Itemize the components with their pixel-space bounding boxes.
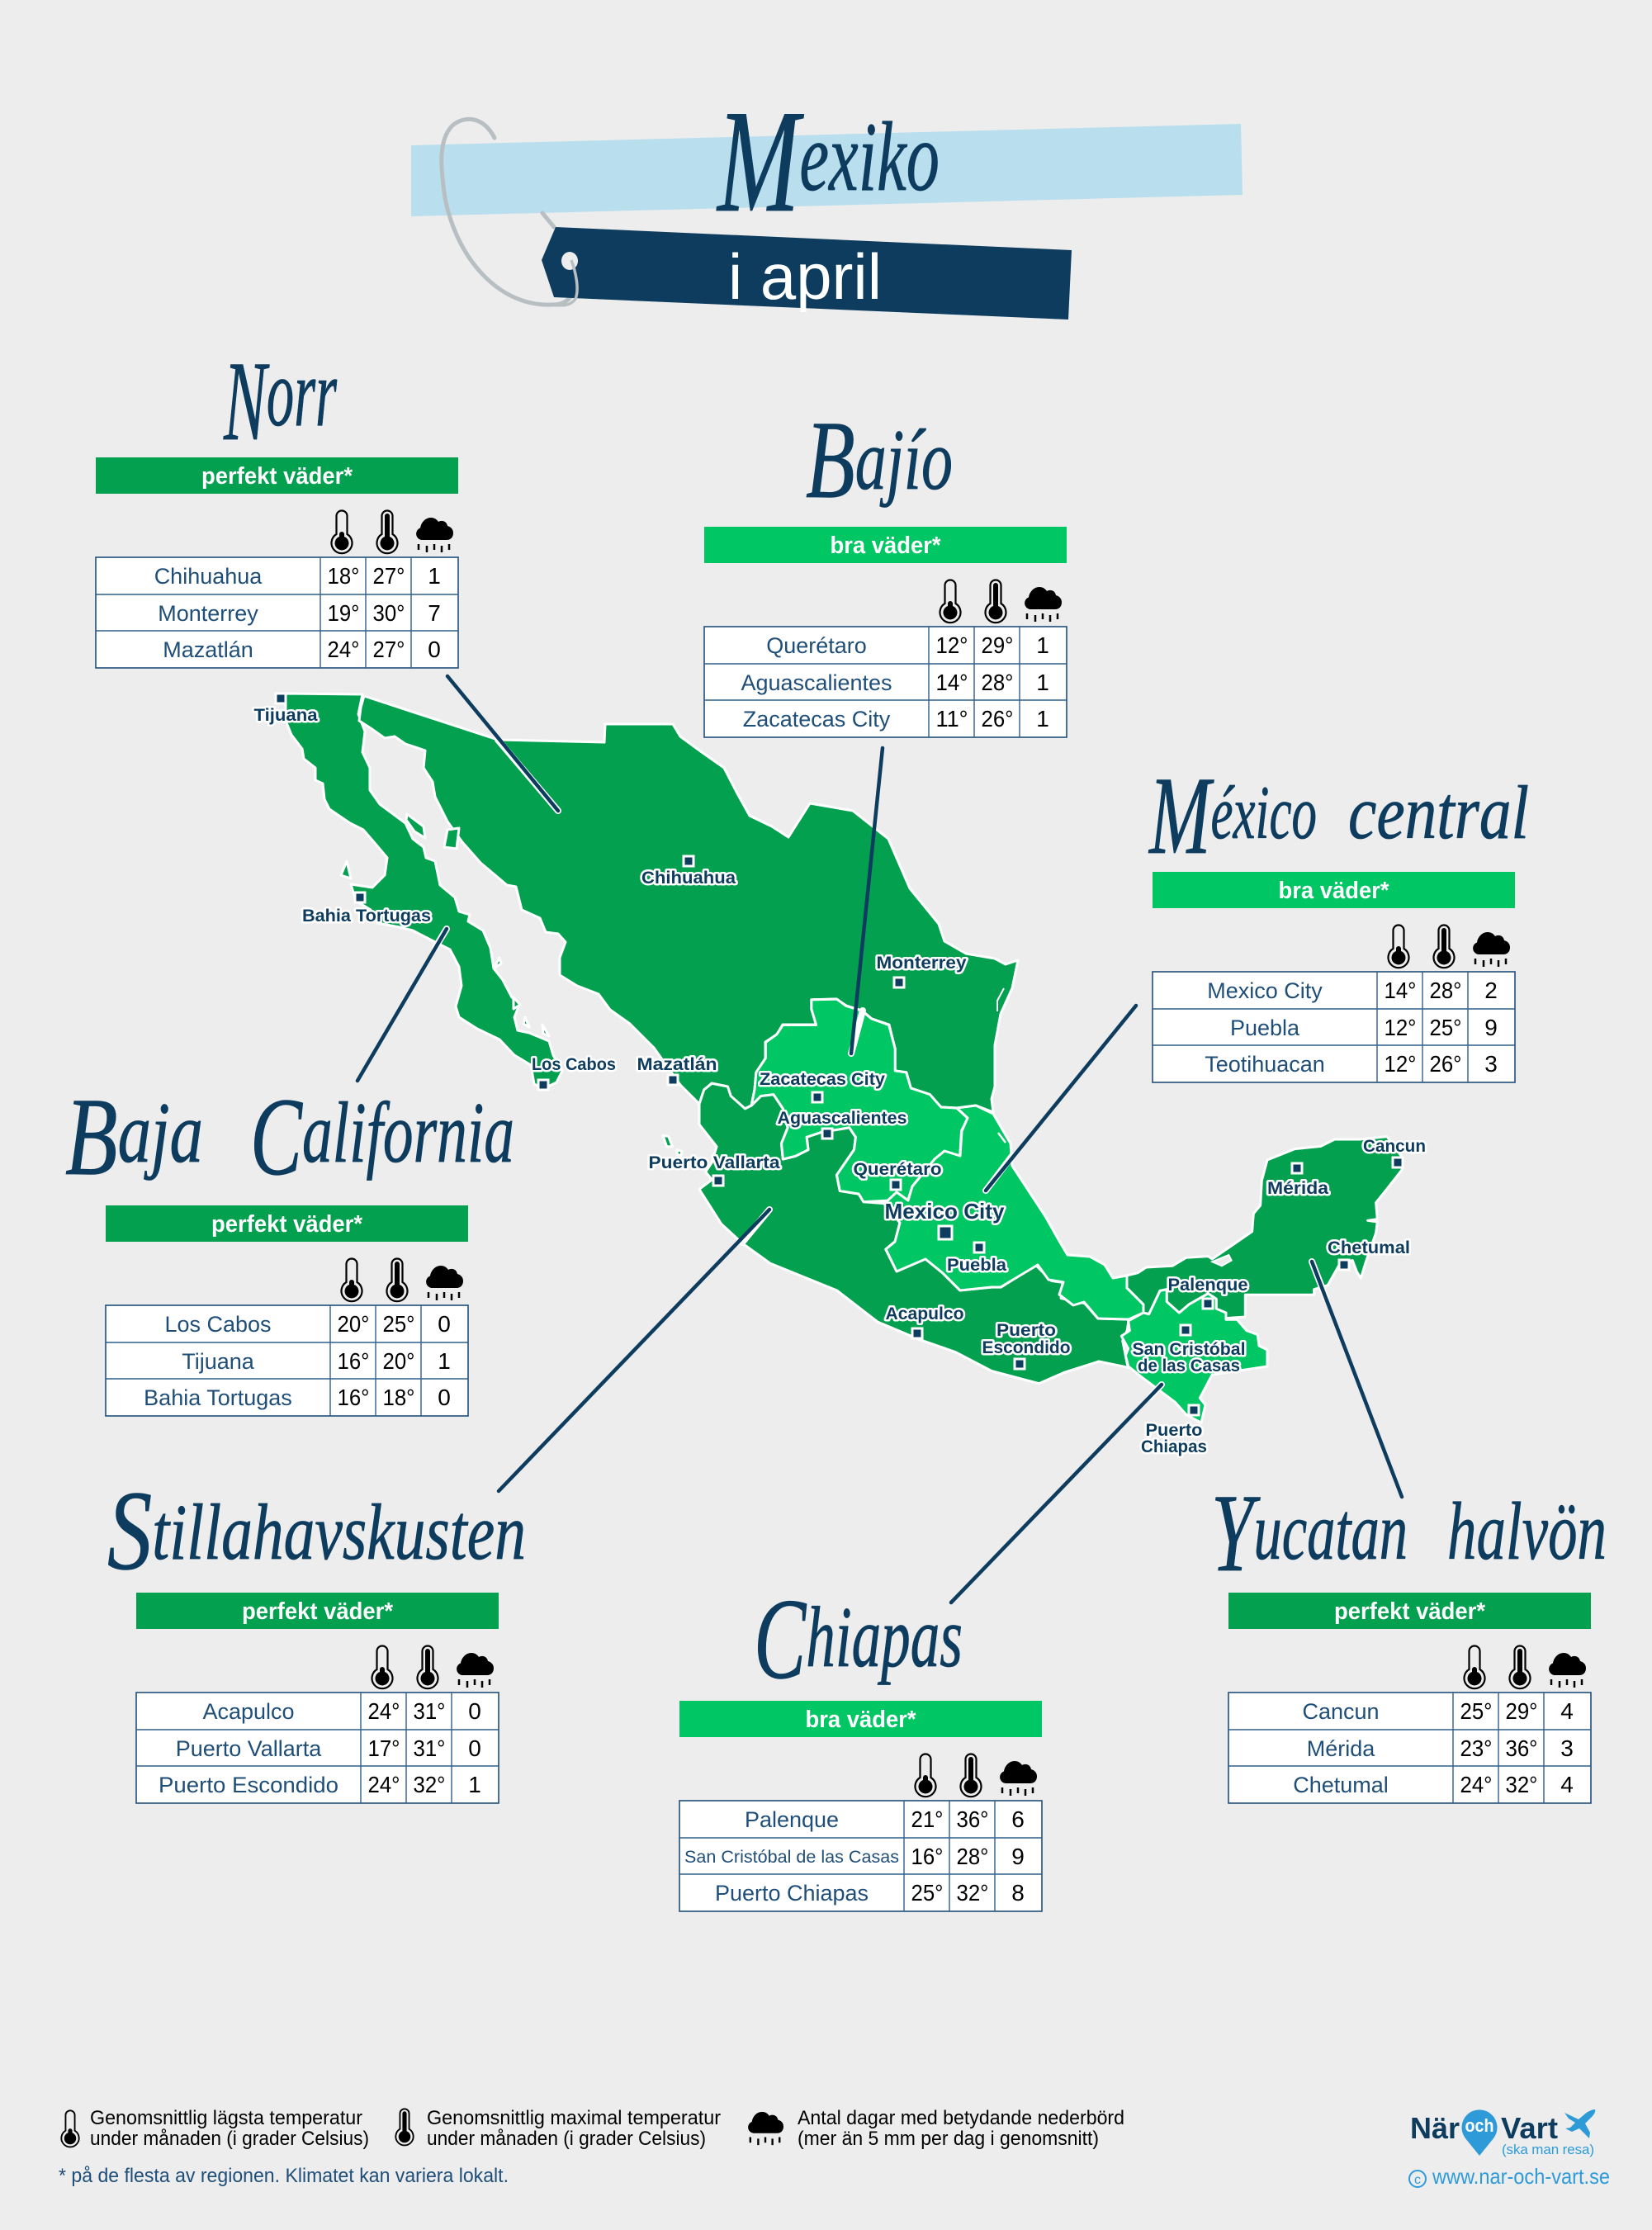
weather table: Mazatlán bbox=[163, 637, 253, 662]
heading: Yucatan halvön bbox=[1211, 1472, 1607, 1595]
badge: perfekt väder bbox=[1228, 1593, 1591, 1629]
weather table: Zacatecas City bbox=[743, 707, 891, 731]
badge: bra väder: bra väder* bbox=[1278, 878, 1389, 904]
weather table: 0 bbox=[468, 1735, 481, 1761]
weather table: 27° bbox=[373, 563, 405, 589]
icon: map pin bbox=[1461, 2109, 1498, 2156]
tagline: (ska man resa) bbox=[1502, 2142, 1594, 2157]
weather table: Teotihuacan bbox=[1205, 1052, 1325, 1077]
region: Yucatan halvön bbox=[1127, 1137, 1402, 1319]
weather table: 2 bbox=[1484, 978, 1498, 1003]
weather table: 1 bbox=[428, 563, 441, 589]
weather table: 36° bbox=[1506, 1735, 1537, 1761]
weather table: 23° bbox=[1460, 1735, 1493, 1761]
weather table: 28° bbox=[981, 670, 1014, 695]
copyright and website: c bbox=[1414, 2173, 1421, 2187]
city labels: Mexico City bbox=[885, 1199, 1005, 1224]
city labels: Chiapas bbox=[1141, 1437, 1207, 1456]
heading: Chiapas: C bbox=[754, 1575, 807, 1703]
weather table: 0 bbox=[438, 1385, 451, 1410]
badge: bra väder bbox=[1153, 872, 1515, 908]
weather table: 26° bbox=[981, 706, 1014, 731]
city labels: Mérida bbox=[1267, 1179, 1328, 1198]
city labels: Acapulco bbox=[885, 1304, 964, 1323]
weather table: 1 bbox=[1036, 706, 1049, 731]
title block: Mexiko i april bbox=[411, 79, 1243, 320]
legend bbox=[59, 2107, 1124, 2187]
heading: México central: éxico bbox=[1210, 770, 1317, 855]
weather table: 18° bbox=[327, 563, 360, 589]
weather table: Los Cabos bbox=[164, 1312, 272, 1337]
weather table: 6 bbox=[1011, 1806, 1025, 1832]
weather table: 31° bbox=[413, 1698, 446, 1724]
leader: Bajío bbox=[851, 748, 883, 1053]
weather table bbox=[96, 557, 458, 668]
weather table: 0 bbox=[468, 1698, 481, 1724]
legend item: minimum temperature bbox=[61, 2107, 369, 2150]
weather table: 25° bbox=[1430, 1015, 1461, 1040]
weather table: Acapulco bbox=[202, 1699, 295, 1724]
weather table: Puerto Vallarta bbox=[176, 1736, 322, 1761]
weather table: 4 bbox=[1560, 1698, 1574, 1724]
weather table: 14° bbox=[936, 670, 968, 695]
weather table: 32° bbox=[1506, 1772, 1537, 1797]
weather table bbox=[136, 1693, 499, 1803]
badge: perfekt väder: perfekt väder* bbox=[211, 1211, 363, 1238]
city labels: Los Cabos bbox=[532, 1055, 616, 1074]
panel: Yucatan halvön bbox=[1211, 1472, 1607, 1803]
city labels: Palenque bbox=[1167, 1276, 1248, 1295]
leader: Yucatan halvön bbox=[1312, 1262, 1402, 1497]
weather table: 32° bbox=[413, 1772, 446, 1797]
weather table bbox=[106, 1305, 468, 1416]
icons: columns bbox=[940, 580, 1062, 623]
city labels: Puerto bbox=[1146, 1421, 1202, 1440]
heading: Baja California: alifornia bbox=[302, 1084, 514, 1181]
weather table: 29° bbox=[981, 632, 1014, 658]
weather table: San Cristóbal de las Casas bbox=[684, 1848, 899, 1867]
heading: Baja California bbox=[65, 1076, 514, 1199]
weather table: 27° bbox=[373, 637, 405, 662]
badge: bra väder: bra väder* bbox=[831, 533, 941, 559]
badge: perfekt väder bbox=[106, 1205, 468, 1242]
weather table: 0 bbox=[428, 637, 441, 662]
weather table: 0 bbox=[438, 1311, 451, 1337]
city markers bbox=[276, 694, 1403, 1415]
subheading: i april: i april bbox=[728, 240, 882, 313]
weather table: 1 bbox=[438, 1348, 451, 1374]
weather table: 29° bbox=[1506, 1698, 1537, 1724]
weather table: Tijuana bbox=[182, 1349, 255, 1374]
weather table: 21° bbox=[911, 1806, 943, 1832]
footnote: * på de flesta av regionen. Klimatet kan variera lokalt. bbox=[59, 2165, 509, 2187]
heading: México central: M bbox=[1148, 755, 1214, 878]
region: Chiapas bbox=[1121, 1290, 1267, 1423]
region: Norr bbox=[359, 696, 1018, 1112]
leader: Baja California bbox=[357, 929, 447, 1081]
weather table: 26° bbox=[1430, 1051, 1461, 1077]
weather table: 4 bbox=[1560, 1772, 1574, 1797]
weather table: Monterrey bbox=[158, 601, 258, 626]
weather table: 9 bbox=[1011, 1844, 1025, 1869]
city labels: Chihuahua bbox=[641, 869, 736, 888]
weather table: 28° bbox=[956, 1844, 989, 1869]
light blue title ribbon bbox=[411, 124, 1243, 216]
heading: México central bbox=[1148, 755, 1529, 878]
heading: Norr: orr bbox=[267, 339, 338, 447]
weather table bbox=[1153, 972, 1515, 1082]
leader lines bbox=[357, 676, 1402, 1603]
string through the hole bbox=[551, 260, 577, 305]
city labels bbox=[254, 706, 1426, 1456]
weather table: 24° bbox=[1460, 1772, 1493, 1797]
leader: México central bbox=[986, 1006, 1136, 1191]
legend item: maximum temperature: Genomsnittlig maximal temperatur bbox=[427, 2107, 721, 2129]
city labels: Querétaro bbox=[854, 1160, 941, 1179]
weather table: 1 bbox=[1036, 632, 1049, 658]
city labels: Zacatecas City bbox=[760, 1070, 885, 1089]
city labels: San Cristóbal bbox=[1133, 1340, 1245, 1359]
heading: Chiapas: hiapas bbox=[806, 1588, 963, 1685]
wordmark: Vart: Vart bbox=[1501, 2111, 1558, 2145]
weather table: 30° bbox=[373, 600, 405, 626]
panel: Norr bbox=[96, 338, 458, 668]
weather table bbox=[1228, 1693, 1591, 1803]
heading: Stillahavskusten: tillahavskusten bbox=[152, 1488, 526, 1576]
weather table: 24° bbox=[327, 637, 360, 662]
weather table: 8 bbox=[1011, 1880, 1025, 1906]
weather table: 32° bbox=[956, 1880, 989, 1906]
map of Mexico bbox=[286, 694, 1402, 1423]
weather table: 19° bbox=[327, 600, 360, 626]
weather table: 25° bbox=[911, 1880, 943, 1906]
heading: Yucatan halvön: Y bbox=[1211, 1472, 1261, 1595]
city labels: Escondido bbox=[982, 1338, 1070, 1357]
weather table: 24° bbox=[368, 1698, 400, 1724]
weather table: 16° bbox=[911, 1844, 943, 1869]
weather table: Chihuahua bbox=[154, 564, 263, 589]
city labels: Mazatlán bbox=[637, 1055, 717, 1074]
heading: Bajío: ajío bbox=[855, 411, 953, 508]
region: Bajío bbox=[751, 999, 968, 1202]
badge: perfekt väder bbox=[136, 1593, 499, 1629]
copyright and website: www.nar-och-vart.se bbox=[1432, 2164, 1610, 2189]
weather table: 17° bbox=[368, 1735, 400, 1761]
icons: columns bbox=[1389, 925, 1510, 968]
panel: México central bbox=[1148, 755, 1529, 1082]
weather table: 18° bbox=[383, 1385, 414, 1410]
heading: Norr: N bbox=[223, 338, 270, 464]
legend item: precipitation days: (mer än 5 mm per dag i genomsnitt) bbox=[798, 2128, 1099, 2150]
heading: Baja California: aja bbox=[118, 1084, 203, 1181]
weather table: Puebla bbox=[1230, 1016, 1300, 1040]
wordmark: och: och bbox=[1465, 2115, 1494, 2136]
weather table: 3 bbox=[1484, 1051, 1498, 1077]
badge: perfekt väder: perfekt väder* bbox=[1334, 1598, 1486, 1625]
panel: Stillahavskusten bbox=[107, 1467, 526, 1803]
badge: perfekt väder: perfekt väder* bbox=[242, 1598, 394, 1625]
weather table: Palenque bbox=[745, 1807, 839, 1832]
legend item: minimum temperature: under månaden (i grader Celsius) bbox=[90, 2128, 369, 2150]
heading: Yucatan halvön: ucatan bbox=[1253, 1485, 1408, 1577]
weather table: Puerto Chiapas bbox=[715, 1881, 869, 1906]
weather table: 12° bbox=[936, 632, 968, 658]
string loop of the tag bbox=[442, 119, 576, 305]
icons: columns bbox=[342, 1258, 463, 1301]
city labels: Puebla bbox=[947, 1256, 1006, 1275]
heading: Mexiko: exiko bbox=[799, 102, 940, 211]
weather table: Mexico City bbox=[1207, 978, 1323, 1003]
weather table: 12° bbox=[1384, 1015, 1417, 1040]
weather table: Querétaro bbox=[766, 633, 867, 658]
heading: México central: central bbox=[1348, 770, 1529, 855]
weather table: 20° bbox=[337, 1311, 370, 1337]
tag hole bbox=[561, 252, 578, 270]
weather table: 14° bbox=[1384, 978, 1417, 1003]
weather table: Aguascalientes bbox=[741, 670, 892, 695]
weather table: 11° bbox=[936, 706, 968, 731]
weather table bbox=[679, 1801, 1042, 1911]
region: Baja California bbox=[286, 694, 562, 1089]
legend item: precipitation days: Antal dagar med betydande nederbörd bbox=[798, 2107, 1124, 2129]
badge: bra väder: bra väder* bbox=[806, 1707, 916, 1733]
panel: Bajío bbox=[704, 399, 1067, 737]
legend item: maximum temperature: under månaden (i grader Celsius) bbox=[427, 2128, 706, 2150]
weather table: 16° bbox=[337, 1385, 370, 1410]
icons: columns bbox=[1465, 1646, 1586, 1688]
weather table: 31° bbox=[413, 1735, 446, 1761]
weather table: Cancun bbox=[1302, 1699, 1380, 1724]
icons: columns bbox=[915, 1754, 1037, 1797]
leader: Chiapas bbox=[951, 1385, 1162, 1603]
weather table: 25° bbox=[383, 1311, 414, 1337]
weather table: 12° bbox=[1384, 1051, 1417, 1077]
panel: Baja California bbox=[65, 1076, 514, 1416]
badge: perfekt väder: perfekt väder* bbox=[201, 463, 353, 490]
navy tag bbox=[542, 227, 1072, 320]
weather table: 7 bbox=[428, 600, 441, 626]
heading: Mexiko: M bbox=[716, 79, 804, 243]
weather table: 20° bbox=[383, 1348, 414, 1374]
weather table: 9 bbox=[1484, 1015, 1498, 1040]
region: México central bbox=[884, 1106, 1143, 1319]
region: Stillahavskusten bbox=[663, 1083, 1137, 1384]
heading: Bajío: B bbox=[806, 399, 855, 522]
city labels: Puerto bbox=[996, 1321, 1056, 1340]
wordmark: När: När bbox=[1410, 2111, 1460, 2145]
icons: columns bbox=[332, 510, 453, 553]
badge: bra väder bbox=[679, 1701, 1042, 1737]
heading: Stillahavskusten: S bbox=[107, 1467, 152, 1593]
weather table: 28° bbox=[1430, 978, 1461, 1003]
weather table: 3 bbox=[1560, 1735, 1574, 1761]
weather table: Mérida bbox=[1307, 1736, 1375, 1761]
badge: bra väder bbox=[704, 527, 1067, 563]
logo: När och Vart bbox=[1409, 2109, 1610, 2189]
city labels: Puerto Vallarta bbox=[649, 1153, 780, 1172]
weather table: 36° bbox=[956, 1806, 989, 1832]
city labels: Bahia Tortugas bbox=[302, 907, 431, 926]
legend item: precipitation days bbox=[748, 2107, 1124, 2150]
city labels: Monterrey bbox=[877, 954, 967, 973]
weather table: Chetumal bbox=[1293, 1773, 1389, 1797]
weather table: Bahia Tortugas bbox=[144, 1385, 292, 1410]
badge: perfekt väder bbox=[96, 457, 458, 494]
legend item: maximum temperature bbox=[395, 2107, 721, 2150]
weather table: 16° bbox=[337, 1348, 370, 1374]
weather table: 25° bbox=[1460, 1698, 1493, 1724]
weather table: 1 bbox=[1036, 670, 1049, 695]
city labels: Cancun bbox=[1363, 1137, 1426, 1156]
weather table: 24° bbox=[368, 1772, 400, 1797]
legend item: minimum temperature: Genomsnittlig lägsta temperatur bbox=[90, 2107, 362, 2129]
weather table: 1 bbox=[468, 1772, 481, 1797]
weather table: Puerto Escondido bbox=[159, 1773, 338, 1797]
leader: Stillahavskusten bbox=[499, 1210, 769, 1491]
icons: columns bbox=[372, 1646, 494, 1688]
leader: Norr bbox=[447, 676, 558, 811]
city labels: Aguascalientes bbox=[778, 1109, 906, 1128]
city labels: Tijuana bbox=[254, 706, 318, 725]
city labels: Chetumal bbox=[1328, 1238, 1410, 1257]
heading: Baja California: B bbox=[65, 1076, 118, 1199]
weather table bbox=[704, 627, 1067, 737]
icon: airplane bbox=[1564, 2109, 1595, 2138]
city labels: de las Casas bbox=[1138, 1356, 1240, 1375]
heading: Baja California: C bbox=[250, 1076, 303, 1199]
panel: Chiapas bbox=[679, 1575, 1042, 1911]
